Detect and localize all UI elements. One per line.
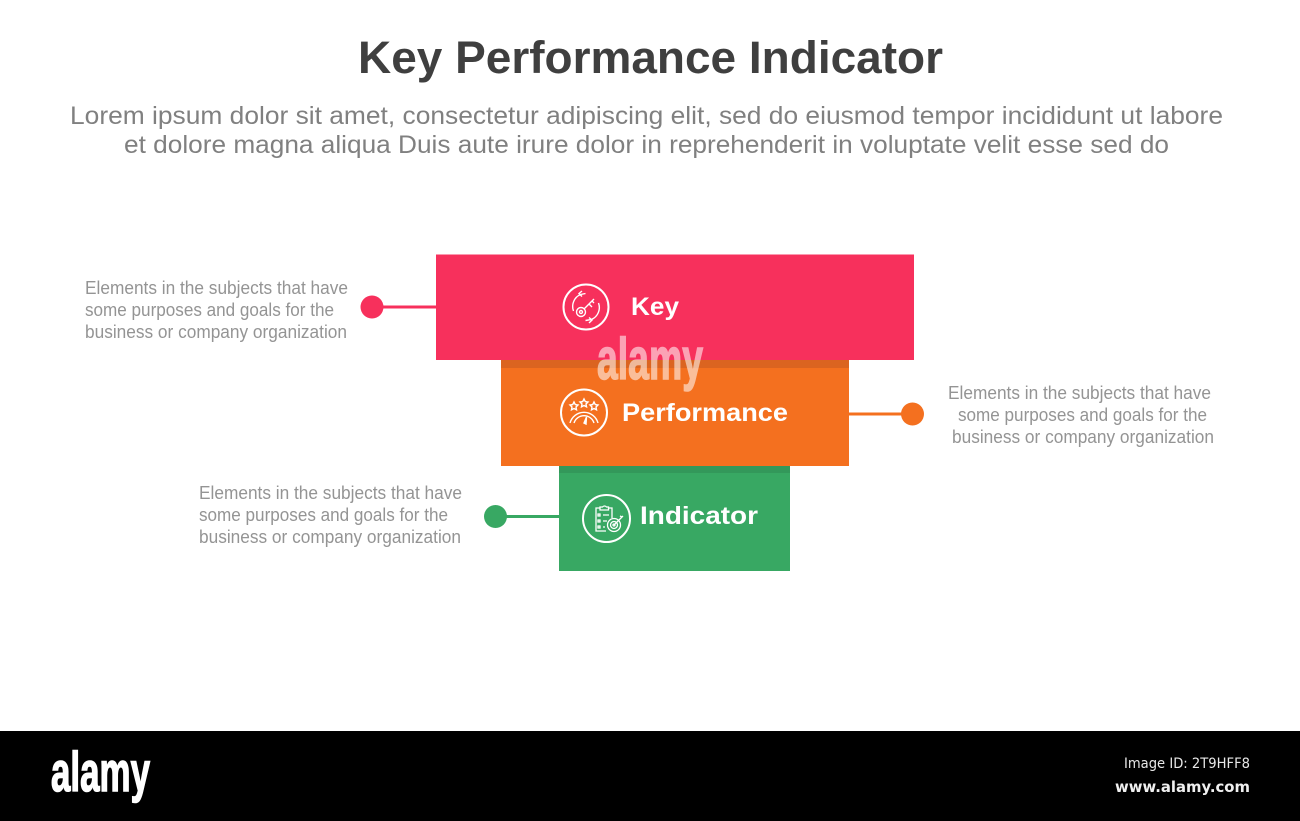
key label: Key <box>631 293 679 321</box>
indicator description <box>199 483 462 547</box>
image id: Image ID: 2T9HFF8 <box>1124 756 1250 772</box>
indicator bar <box>559 466 790 571</box>
indicator description: business or company organization <box>199 527 461 547</box>
panel: key <box>360 254 914 360</box>
title: Key Performance Indicator <box>358 32 943 83</box>
performance bar <box>501 360 849 466</box>
icon: clipboard with target <box>583 495 630 542</box>
footer band <box>0 731 1300 821</box>
key description: business or company organization <box>85 322 347 342</box>
icon: gauge with stars <box>561 390 607 436</box>
indicator description: Elements in the subjects that have <box>199 483 462 503</box>
website: www.alamy.com <box>1115 778 1250 796</box>
performance connector <box>848 402 924 426</box>
icon: key in cycle <box>564 284 608 330</box>
subtitle text <box>70 102 1223 159</box>
footer logo: alamy <box>51 740 150 803</box>
performance description <box>948 383 1214 447</box>
subtitle text: et dolore magna aliqua Duis aute irure dolor in reprehenderit in voluptate velit esse sed do <box>124 131 1169 159</box>
watermark: alamy <box>597 327 703 392</box>
panel: performance <box>501 360 924 466</box>
performance description: business or company organization <box>952 427 1214 447</box>
indicator description: some purposes and goals for the <box>199 505 448 525</box>
performance description: Elements in the subjects that have <box>948 383 1211 403</box>
indicator connector <box>484 505 560 528</box>
key bar <box>436 254 914 360</box>
key description <box>85 278 348 342</box>
performance description: some purposes and goals for the <box>958 405 1207 425</box>
key connector <box>360 296 437 318</box>
key description: Elements in the subjects that have <box>85 278 348 298</box>
performance label: Performance <box>622 399 788 427</box>
subtitle text: Lorem ipsum dolor sit amet, consectetur adipiscing elit, sed do eiusmod tempor incididunt ut labore <box>70 102 1223 130</box>
panel: indicator <box>484 466 790 571</box>
key description: some purposes and goals for the <box>85 300 334 320</box>
indicator label: Indicator <box>640 502 758 530</box>
